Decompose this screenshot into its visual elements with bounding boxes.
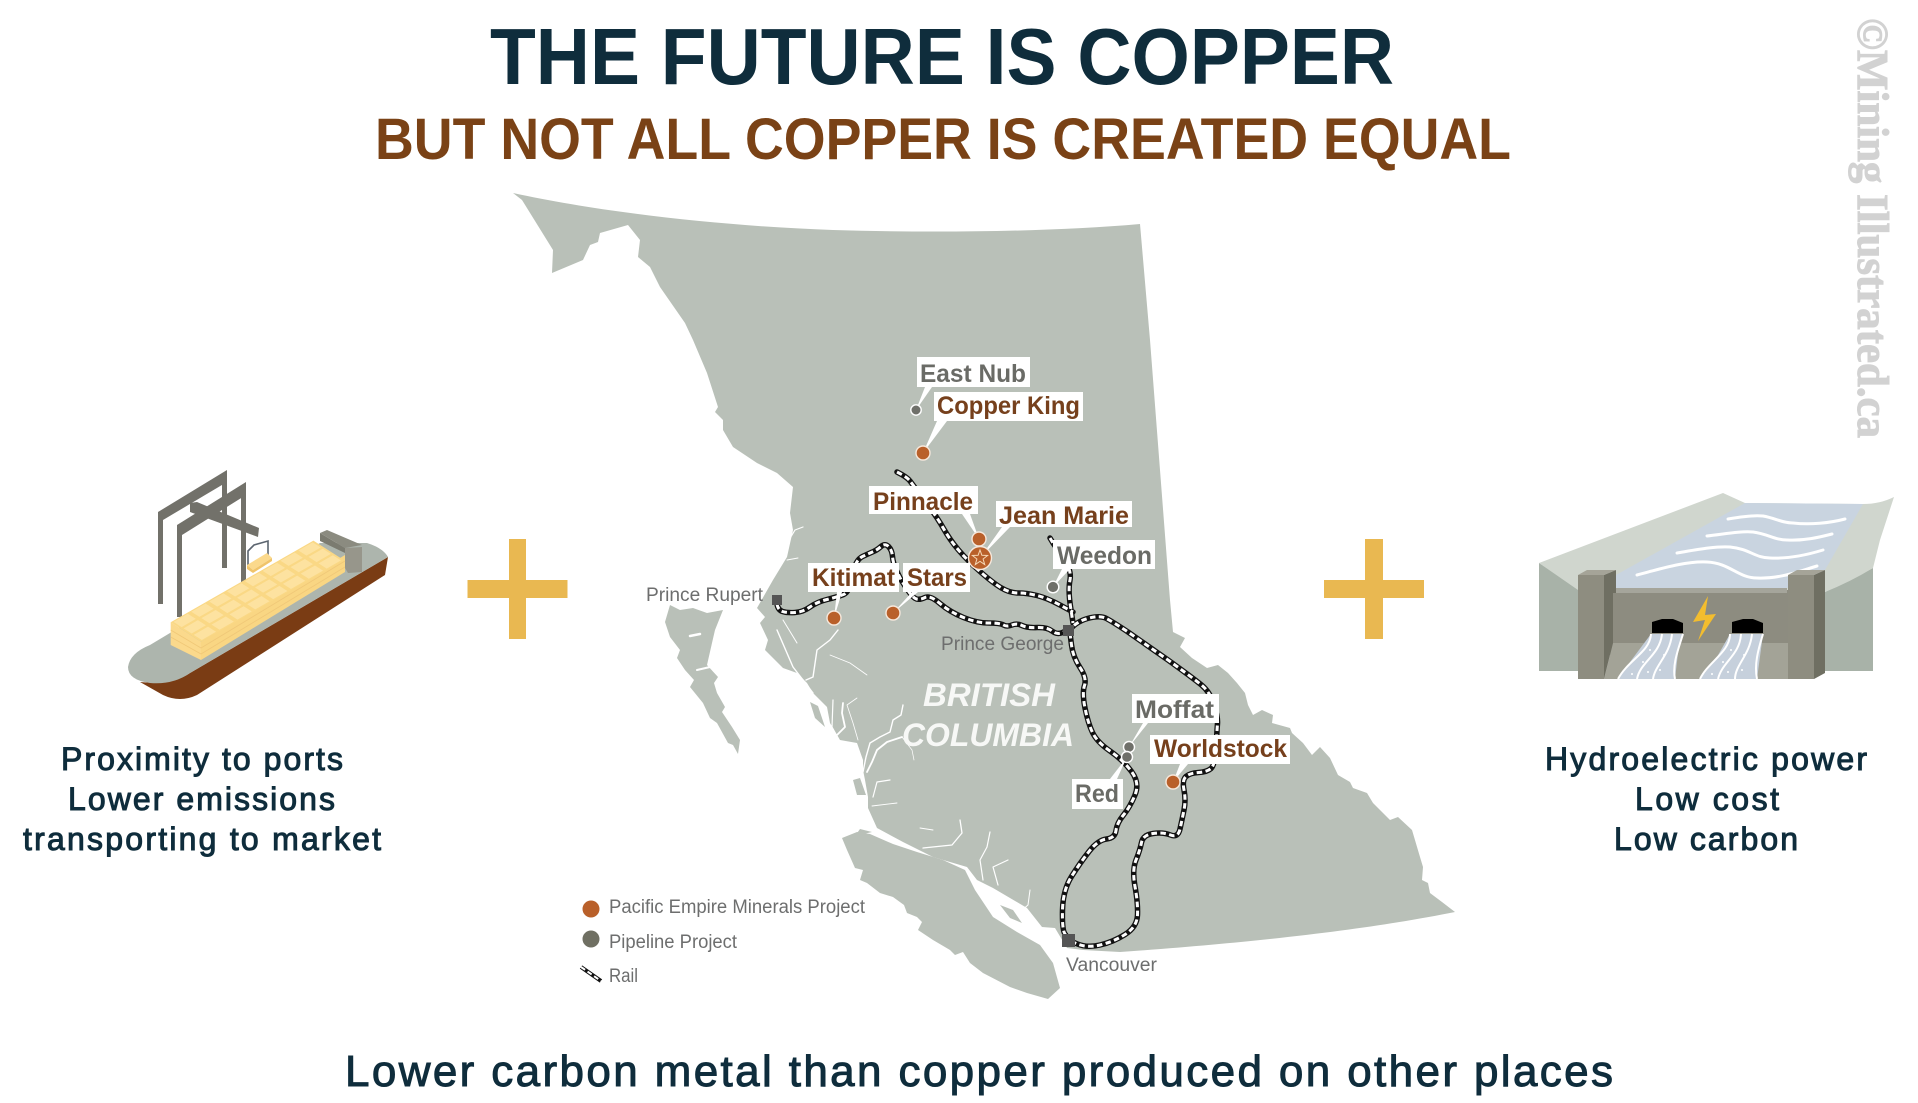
- Haida Gwaii: [665, 605, 740, 754]
- city label: Prince George: Prince George: [941, 634, 1064, 655]
- legend: rail sample: [581, 967, 601, 981]
- map: British Columbia: [513, 193, 1455, 999]
- fjords: [690, 527, 1030, 912]
- label: Copper King: [916, 392, 1083, 460]
- legend: project label: Pacific Empire Minerals Project: [609, 897, 866, 918]
- label: Worldstock: [1150, 735, 1290, 789]
- text: hydro benefits: Low cost: [1635, 781, 1779, 817]
- water flow: [1618, 634, 1763, 679]
- label: Moffat: Moffat: [1135, 696, 1215, 724]
- legend: project dot: [582, 900, 600, 918]
- text: ports benefits: [23, 741, 381, 857]
- mainland: [513, 193, 1455, 952]
- dam left tower: [1578, 570, 1616, 679]
- icon: left plus: [468, 539, 568, 639]
- legend: rail label: Rail: [609, 966, 638, 987]
- lightning bolt: [1693, 596, 1716, 641]
- label: Pinnacle: Pinnacle: [873, 488, 973, 516]
- icon: right plus: [1324, 539, 1424, 639]
- legend: [581, 897, 866, 987]
- gates: [1652, 619, 1763, 633]
- label: Kitimat: [808, 563, 899, 625]
- label: Stars: [886, 563, 970, 620]
- label: Pinnacle: [869, 486, 986, 546]
- ship bridge: [320, 530, 362, 573]
- subtitle: BUT NOT ALL COPPER IS CREATED EQUAL: [375, 107, 1511, 172]
- label: Red: [1072, 752, 1132, 809]
- city markers: [772, 595, 1075, 947]
- legend: pipeline label: Pipeline Project: [609, 932, 738, 953]
- cargo stack: [171, 541, 345, 660]
- text: ports benefits: Proximity to ports: [61, 741, 343, 777]
- icon: cargo ship at port: [128, 470, 388, 699]
- ship deck: [128, 543, 388, 683]
- rail lines: [777, 472, 1218, 946]
- icon: hydroelectric dam: [1539, 493, 1894, 679]
- region name: BRITISH: [923, 677, 1056, 713]
- label: Worldstock: Worldstock: [1154, 735, 1287, 763]
- legend: pipeline dot: [582, 930, 600, 948]
- label: Kitimat: Kitimat: [812, 564, 896, 592]
- ship hull: [140, 557, 388, 699]
- label: Red: Red: [1075, 780, 1119, 808]
- hanging cargo: [247, 541, 272, 573]
- label: Moffat: [1124, 694, 1219, 752]
- text: hydro benefits: [1545, 741, 1867, 857]
- text: ports benefits: transporting to market: [23, 821, 381, 857]
- text: ports benefits: Lower emissions: [68, 781, 335, 817]
- reservoir waves: [1637, 516, 1845, 578]
- text: hydro benefits: Hydroelectric power: [1545, 741, 1867, 777]
- reservoir: [1616, 503, 1863, 588]
- dam wall: [1604, 588, 1798, 679]
- bottom statement: Lower carbon metal than copper produced on other places: [345, 1047, 1613, 1096]
- label: Jean Marie: [968, 501, 1132, 570]
- label: Copper King: Copper King: [937, 392, 1080, 420]
- city label: Vancouver: Vancouver: [1066, 955, 1158, 976]
- title: THE FUTURE IS COPPER: [490, 12, 1394, 101]
- label: East Nub: [911, 357, 1030, 415]
- label: Stars: Stars: [907, 564, 967, 592]
- text: hydro benefits: Low carbon: [1614, 821, 1798, 857]
- crane rear: [158, 470, 227, 604]
- dam right tower: [1788, 570, 1825, 679]
- Vancouver Island: [842, 832, 1060, 999]
- label: East Nub: East Nub: [920, 360, 1026, 388]
- watermark: ©Mining Illustrated.ca: [1848, 18, 1897, 438]
- region name: COLUMBIA: [902, 717, 1074, 753]
- crane front: [177, 482, 259, 617]
- label: Jean Marie: Jean Marie: [999, 502, 1129, 530]
- city label: Prince Rupert: Prince Rupert: [646, 585, 764, 606]
- small islands: [810, 702, 1022, 923]
- label: Weedon: Weedon: [1057, 542, 1152, 570]
- region name: [902, 677, 1074, 753]
- label: Weedon: [1047, 540, 1155, 593]
- dam surrounding land: [1539, 493, 1894, 671]
